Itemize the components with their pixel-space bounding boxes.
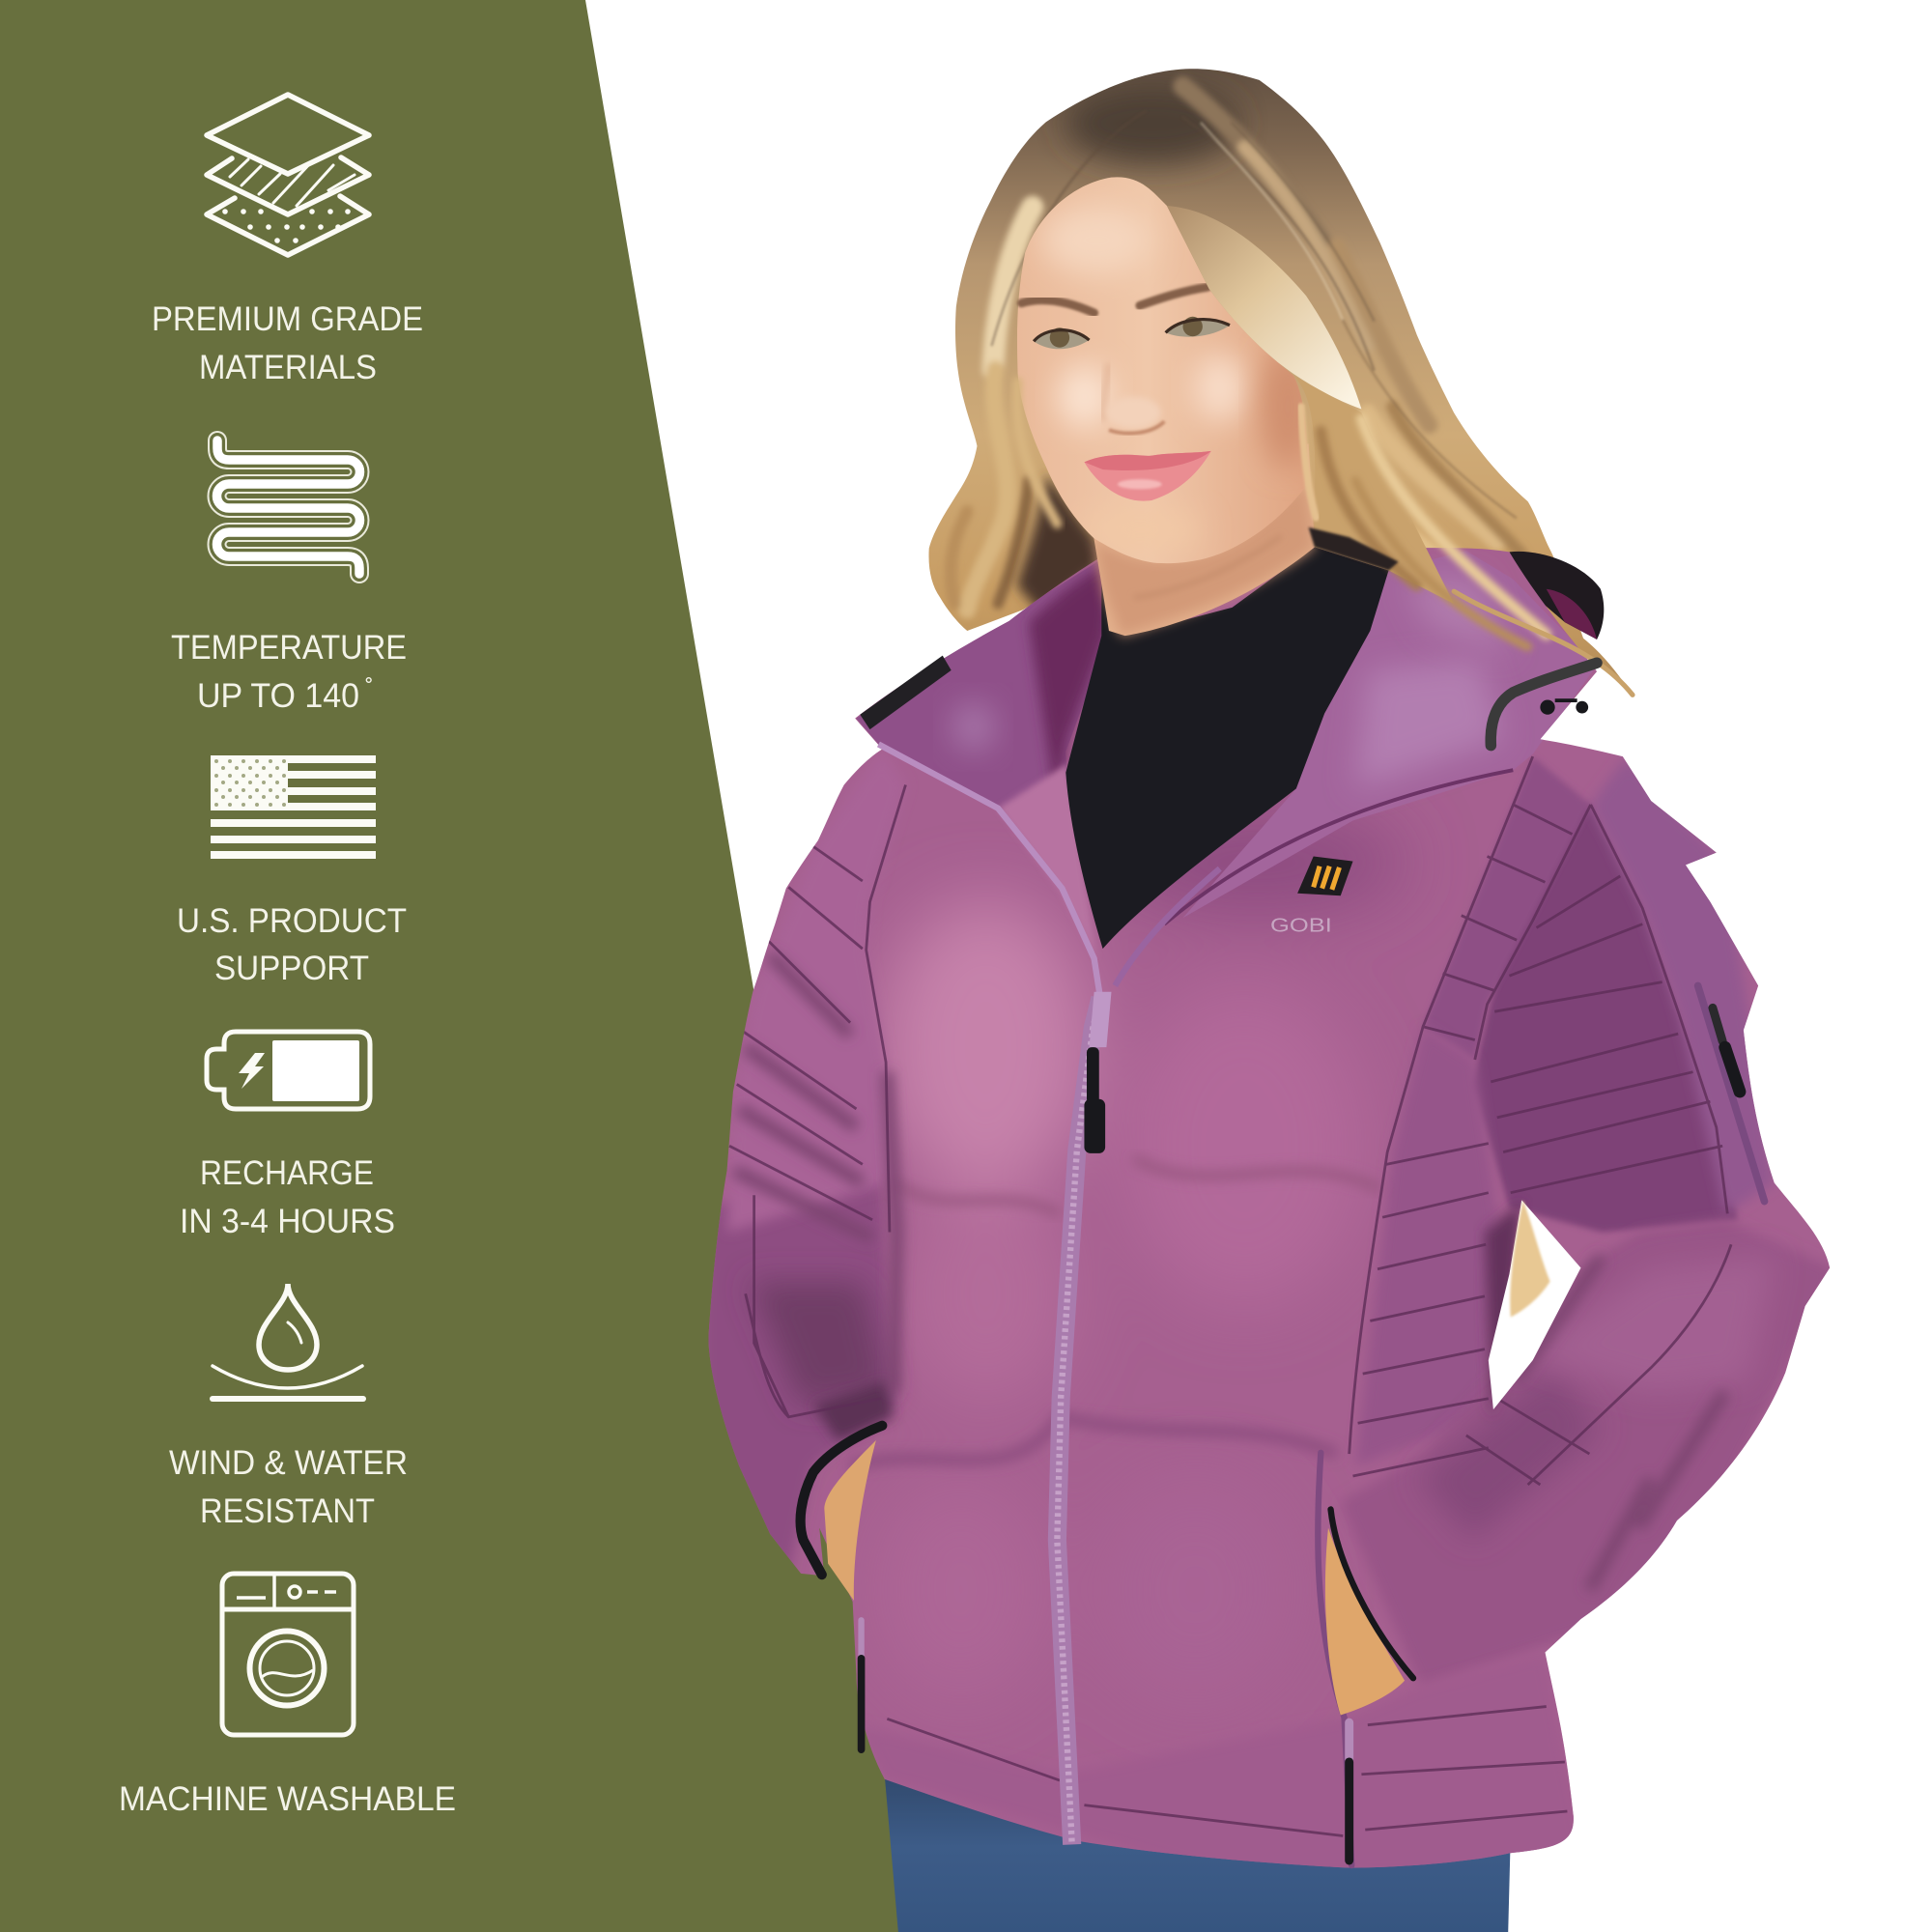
label: recharge in 3-4 hours: RECHARGE — [200, 1154, 374, 1192]
zipper: centre front — [878, 744, 1220, 1844]
label: premium grade materials — [152, 300, 423, 386]
turtleneck — [1065, 547, 1388, 949]
panel: olive features column — [0, 0, 914, 1932]
feature: wind and water resistant — [169, 1284, 408, 1530]
zipper pull: black — [1084, 1047, 1105, 1153]
label: U.S. product support: SUPPORT — [214, 950, 369, 987]
label: U.S. product support: U.S. PRODUCT — [177, 902, 407, 940]
label: premium grade materials: PREMIUM GRADE — [152, 300, 423, 338]
label: wind and water resistant: WIND & WATER — [169, 1444, 408, 1482]
jacket — [690, 529, 1848, 1897]
feature: premium grade materials — [152, 95, 423, 386]
quilting lines — [729, 756, 1731, 1835]
icon: charging battery — [207, 1032, 370, 1109]
pocket zippers — [862, 1453, 1351, 1865]
label: wind and water resistant: RESISTANT — [200, 1492, 375, 1530]
feature: U.S. product support — [177, 755, 407, 987]
hood: dark lining at back — [1509, 552, 1604, 639]
feature: recharge — [180, 1032, 395, 1240]
chest patch: three-bar heat logo — [1297, 856, 1352, 895]
collar: right — [1182, 551, 1597, 918]
label: temperature up to 140 degrees: UP TO 140 — [197, 677, 359, 715]
face — [1016, 177, 1303, 564]
feature: machine washable — [119, 1574, 456, 1818]
hood drawcord and toggles — [1491, 663, 1597, 746]
feature: temperature — [171, 440, 407, 715]
collar shadow band — [860, 656, 952, 729]
label: wind and water resistant — [169, 1444, 408, 1530]
icon: heating element coil — [216, 440, 359, 574]
hair: front strands — [1017, 206, 1633, 695]
label: machine washable: MACHINE WASHABLE — [119, 1780, 456, 1818]
label: recharge in 3-4 hours: IN 3-4 HOURS — [180, 1203, 395, 1240]
photo: woman wearing a plum heated puffer jacket — [690, 62, 1848, 1932]
eyebrows — [1021, 300, 1094, 313]
icon: washing machine — [222, 1574, 354, 1735]
label: premium grade materials: MATERIALS — [199, 349, 377, 386]
label: recharge in 3-4 hours — [180, 1154, 395, 1240]
icon: American flag — [211, 755, 376, 859]
hair: back layer — [929, 69, 1621, 679]
icon: stacked material layers — [207, 95, 369, 255]
lips — [1084, 451, 1211, 501]
label: temperature up to 140 degrees: TEMPERATURE — [171, 629, 407, 667]
eyes — [1034, 317, 1230, 349]
jeans — [884, 1762, 1511, 1932]
neck — [1091, 443, 1315, 636]
hands — [824, 1440, 1405, 1715]
nose — [1103, 363, 1164, 434]
icon: water drop on membrane — [213, 1284, 363, 1399]
label: temperature up to 140 degrees: ˚ — [365, 674, 374, 703]
sleeve zipper — [1698, 985, 1765, 1202]
arm gap with hair strand — [1489, 1200, 1580, 1409]
chest logo: brand mark: GOBI — [1270, 915, 1332, 936]
cuffs: black edging — [801, 1426, 1413, 1678]
label: temperature up to 140 degrees — [171, 629, 407, 715]
jacket: shading and colour zones — [702, 750, 1835, 1879]
label: U.S. product support — [177, 902, 407, 987]
collar: left — [856, 562, 1097, 808]
